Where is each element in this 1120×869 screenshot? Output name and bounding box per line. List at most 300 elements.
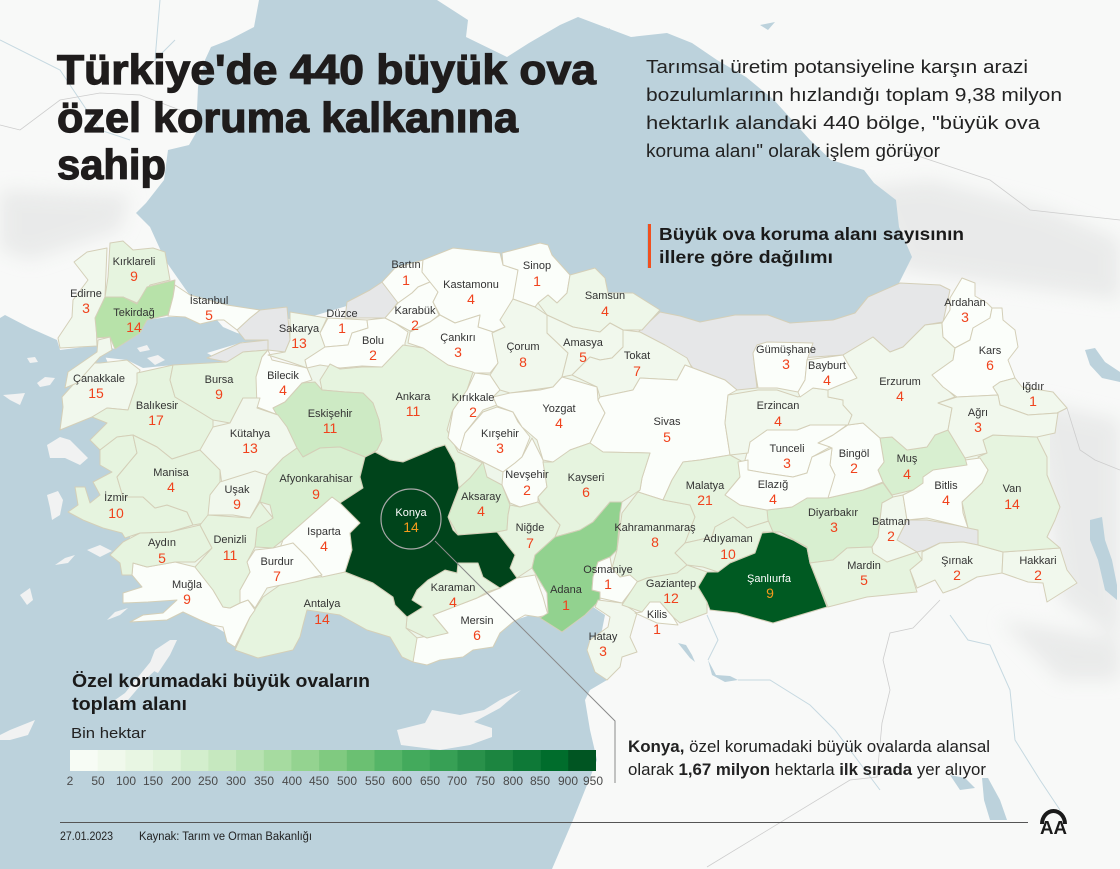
title: Türkiye'de 440 büyük ova: [57, 46, 597, 93]
label: Bolu: 2: [369, 347, 377, 363]
label: Çankırı: [440, 332, 476, 360]
label: Batman: 2: [887, 528, 895, 544]
label: Nevşehir: Nevşehir: [505, 469, 549, 481]
label: Samsun: [585, 290, 625, 319]
label: Bayburt: [808, 360, 846, 388]
legend scale values: 50: [91, 774, 105, 788]
province: Ankara: [320, 345, 483, 488]
label: Sinop: Sinop: [523, 260, 551, 272]
label: Niğde: [516, 522, 544, 551]
label: Karaman: Karaman: [431, 582, 475, 594]
label: Aksaray: 4: [477, 503, 485, 519]
label: Kırıkkale: Kırıkkale: [452, 392, 494, 404]
label: Nevşehir: 2: [523, 482, 531, 498]
legend scale values: 900: [558, 774, 578, 788]
label: Çanakkale: 15: [88, 385, 104, 401]
label: Elazığ: [758, 479, 788, 507]
label: Muş: [897, 453, 918, 482]
province: Şanlıurfa: [698, 532, 827, 623]
label: Niğde: Niğde: [516, 522, 544, 534]
label: Ağrı: Ağrı: [968, 407, 988, 419]
province: Afyonkarahisar: [255, 447, 365, 548]
label: Düzce: [326, 308, 358, 336]
province: Eskişehir: [273, 382, 382, 457]
label: İzmir: [104, 491, 128, 521]
label: Kütahya: Kütahya: [230, 428, 271, 440]
province: Gümüşhane: [753, 342, 813, 392]
label: Muğla: Muğla: [172, 579, 203, 591]
label: Kars: [979, 345, 1002, 373]
label: Konya: 14: [403, 519, 419, 535]
label: Yozgat: Yozgat: [542, 403, 576, 415]
label: Iğdır: [1022, 381, 1044, 409]
label: Aksaray: Aksaray: [461, 491, 501, 503]
label: Samsun: 4: [601, 303, 609, 319]
label: Antalya: [304, 598, 341, 627]
province: Çorum: [490, 299, 568, 393]
province: Karaman: [406, 563, 500, 638]
label: Karabük: Karabük: [395, 305, 436, 317]
map labels: [70, 256, 1057, 659]
label: Edirne: [70, 288, 102, 316]
label: Kütahya: 13: [242, 440, 258, 456]
intro text: koruma alanı" olarak işlem görüyor: [646, 140, 940, 161]
label: Düzce: Düzce: [326, 308, 358, 320]
label: Aydın: 5: [158, 550, 166, 566]
label: Adıyaman: [703, 533, 753, 562]
province: Diyarbakır: [767, 483, 893, 563]
label: Yozgat: 4: [555, 415, 563, 431]
label: Şanlıurfa: 9: [766, 585, 774, 601]
label: Kırşehir: 3: [496, 440, 504, 456]
label: Bitlis: 4: [942, 492, 950, 508]
province: Kırşehir: [460, 407, 530, 472]
label: Adıyaman: 10: [720, 546, 736, 562]
province: Isparta: [280, 497, 360, 577]
label: Tunceli: 3: [783, 455, 791, 471]
label: Antalya: 14: [314, 611, 330, 627]
province: Aydın: [110, 525, 212, 575]
label: Kars: 6: [986, 357, 994, 373]
legend heading: [72, 671, 370, 714]
map: provinces of Türkiye: [58, 241, 1077, 680]
islands: [0, 345, 521, 750]
label: Niğde: 7: [526, 535, 534, 551]
intro text: [646, 56, 1062, 161]
label: Erzincan: 4: [774, 413, 782, 429]
label: Sinop: [523, 260, 551, 289]
label: Nevşehir: [505, 469, 549, 498]
label: Karaman: [431, 582, 475, 610]
label: Bartın: 1: [402, 272, 410, 288]
legend unit: Bin hektar: [71, 725, 146, 742]
province: Osmaniye: [592, 557, 638, 603]
label: Amasya: [563, 337, 604, 365]
province: Sakarya: [268, 312, 327, 368]
label: Kahramanmaraş: 8: [651, 534, 659, 550]
sea: Marmara: [68, 317, 268, 388]
legend heading: toplam alanı: [72, 694, 187, 714]
label: Adana: Adana: [550, 584, 583, 596]
label: Balıkesir: Balıkesir: [136, 400, 178, 412]
label: Şanlıurfa: [747, 573, 792, 601]
province: Bilecik: [256, 350, 312, 415]
label: Karabük: 2: [411, 317, 419, 333]
label: Karaman: 4: [449, 594, 457, 610]
province: Tokat: [572, 330, 692, 397]
label: Kırklareli: [113, 256, 155, 284]
label: Bitlis: [934, 480, 958, 508]
label: Batman: [872, 516, 910, 544]
label: Afyonkarahisar: Afyonkarahisar: [279, 473, 353, 485]
legend scale values: 550: [365, 774, 385, 788]
label: Uşak: [224, 484, 250, 512]
label: Hakkari: 2: [1034, 567, 1042, 583]
province: Amasya: [547, 315, 623, 377]
province: Edirne: [58, 248, 107, 348]
label: Ağrı: [968, 407, 988, 435]
label: Afyonkarahisar: 9: [312, 486, 320, 502]
province: Hakkari: [1002, 548, 1077, 602]
legend scale values: 150: [143, 774, 163, 788]
label: Denizli: 11: [223, 547, 237, 563]
label: Balıkesir: [136, 400, 178, 428]
label: Edirne: 3: [82, 300, 90, 316]
province: İzmir: [68, 435, 193, 538]
label: Erzurum: Erzurum: [879, 376, 921, 388]
label: Bingöl: [839, 448, 869, 476]
label: Edirne: Edirne: [70, 288, 102, 300]
label: Eskişehir: [308, 408, 353, 436]
province: Iğdır: [993, 378, 1067, 415]
province: Erzincan: [725, 388, 852, 455]
label: Gümüşhane: [756, 344, 816, 372]
province: Kütahya: [200, 398, 297, 485]
label: Amasya: Amasya: [563, 337, 604, 349]
province: Bingöl: [818, 423, 884, 498]
label: Batman: Batman: [872, 516, 910, 528]
label: Bursa: 9: [215, 386, 223, 402]
legend colour scale: [70, 750, 596, 771]
label: Diyarbakır: 3: [830, 519, 838, 535]
province: Kırıkkale: [448, 373, 500, 451]
province: Nevşehir: [502, 438, 547, 507]
label: Erzincan: [757, 400, 799, 429]
label: Kastamonu: [443, 279, 499, 307]
label: Manisa: 4: [167, 479, 175, 495]
label: Manisa: [153, 467, 190, 495]
label: Çankırı: Çankırı: [440, 332, 476, 344]
province: Mersin: [413, 575, 548, 665]
label: Tekirdağ: 14: [126, 319, 142, 335]
province: Bartın: [382, 260, 430, 303]
label: Konya: [395, 507, 427, 535]
label: Şırnak: Şırnak: [941, 555, 973, 567]
icon: AA logo: [1040, 809, 1067, 838]
label: Çorum: [506, 341, 540, 370]
label: Adana: 1: [562, 597, 570, 613]
label: Osmaniye: Osmaniye: [583, 564, 633, 576]
legend scale values: 450: [309, 774, 329, 788]
label: Iğdır: Iğdır: [1022, 381, 1044, 393]
label: Kars: Kars: [979, 345, 1002, 357]
province: İstanbul: [168, 285, 260, 330]
province: Kars: [932, 308, 1018, 397]
label: Ankara: Ankara: [396, 391, 431, 403]
label: Erzurum: [879, 376, 921, 404]
label: Malatya: [686, 480, 725, 508]
province: Manisa: [117, 435, 220, 525]
label: Çankırı: 3: [454, 344, 462, 360]
label: Ardahan: 3: [961, 309, 969, 325]
background: terrain shading: [0, 180, 1120, 680]
label: Diyarbakır: Diyarbakır: [808, 507, 858, 519]
province: Şırnak: [910, 542, 1003, 593]
label: Muş: Muş: [897, 453, 918, 465]
label: Ardahan: Ardahan: [944, 297, 986, 309]
province: Batman: [872, 495, 917, 562]
legend scale values: 850: [530, 774, 550, 788]
label: Kahramanmaraş: [614, 522, 696, 550]
label: Ağrı: 3: [974, 419, 982, 435]
label: Çorum: 8: [519, 354, 527, 370]
province: Uşak: [208, 471, 267, 518]
label: Tokat: [624, 350, 650, 379]
intro text: hektarlık alandaki 440 bölge, "büyük ova: [646, 112, 1041, 133]
label: Bitlis: Bitlis: [934, 480, 958, 492]
province: Kilis: [635, 602, 678, 625]
label: Ankara: 11: [406, 403, 420, 419]
label: Muğla: 9: [183, 591, 191, 607]
label: Çanakkale: [73, 373, 125, 401]
footer rule: [60, 822, 1028, 823]
intro text: Tarımsal üretim potansiyeline karşın arazi: [646, 56, 1028, 77]
province: Adıyaman: [675, 517, 773, 572]
island: Cyprus: [397, 690, 521, 750]
label: Bilecik: [267, 370, 299, 398]
map subheading: illere göre dağılımı: [659, 247, 833, 267]
label: Sivas: Sivas: [654, 416, 681, 428]
label: Düzce: 1: [338, 320, 346, 336]
label: Burdur: [260, 556, 294, 584]
non-highlighted grey coast provinces: [207, 282, 978, 552]
label: Uşak: 9: [233, 496, 241, 512]
legend scale values: 2: [67, 774, 74, 788]
label: İstanbul: İstanbul: [190, 294, 228, 307]
province: Erzurum: [828, 323, 955, 450]
label: Erzincan: Erzincan: [757, 400, 799, 412]
label: Elazığ: Elazığ: [758, 479, 788, 491]
label: Gaziantep: 12: [663, 590, 679, 606]
label: Şırnak: [941, 555, 973, 583]
label: Eskişehir: Eskişehir: [308, 408, 353, 420]
label: Kırklareli: Kırklareli: [113, 256, 155, 268]
label: Yozgat: [542, 403, 576, 431]
callout: Konya: Konya, özel korumadaki büyük ovalarda alansal: [628, 738, 990, 756]
label: Osmaniye: [583, 564, 633, 592]
province: Kahramanmaraş: [612, 492, 695, 582]
label: Kilis: [647, 609, 668, 637]
label: Kilis: 1: [653, 621, 661, 637]
province: Bayburt: [798, 355, 857, 397]
label: İstanbul: 5: [205, 307, 213, 323]
label: Kayseri: [568, 472, 604, 500]
province: Tunceli: [745, 425, 847, 477]
label: Muş: 4: [903, 466, 911, 482]
label: Tunceli: [769, 443, 805, 471]
label: Manisa: Manisa: [153, 467, 190, 479]
label: Kırşehir: Kırşehir: [481, 428, 519, 440]
label: Kilis: Kilis: [647, 609, 668, 621]
label: Muğla: [172, 579, 203, 607]
label: Kırklareli: 9: [130, 268, 138, 284]
label: Hatay: [589, 631, 618, 659]
label: Bursa: [205, 374, 234, 402]
legend scale values: 300: [226, 774, 246, 788]
legend scale values: 600: [392, 774, 412, 788]
label: Şanlıurfa: Şanlıurfa: [747, 573, 792, 585]
legend scale values: 100: [116, 774, 136, 788]
Konya callout circle: [381, 489, 441, 549]
province: Karabük: [385, 282, 439, 331]
province: Balıkesir: [90, 365, 213, 459]
province: Muş: [878, 430, 967, 495]
label: Aydın: Aydın: [148, 537, 176, 549]
province: Yozgat: [493, 377, 605, 462]
province: Muğla: [123, 562, 255, 647]
Konya callout leader line: [435, 541, 615, 783]
label: Hatay: Hatay: [589, 631, 618, 643]
province: Antalya: [235, 572, 417, 662]
intro text: bozulumlarının hızlandığı toplam 9,38 milyon: [646, 84, 1062, 105]
legend scale values: 950: [583, 774, 603, 788]
label: Isparta: 4: [320, 538, 328, 554]
label: Ardahan: [944, 297, 986, 325]
footer date: 27.01.2023: [60, 831, 113, 843]
title: özel koruma kalkanına: [57, 94, 519, 141]
label: İstanbul: [190, 294, 228, 323]
label: Mardin: Mardin: [847, 560, 881, 572]
label: Isparta: Isparta: [307, 526, 342, 538]
label: Denizli: Denizli: [213, 534, 247, 546]
label: Elazığ: 4: [769, 491, 777, 507]
label: Kastamonu: Kastamonu: [443, 279, 499, 291]
legend scale values: 400: [282, 774, 302, 788]
label: Mersin: Mersin: [460, 615, 494, 627]
label: Gaziantep: [646, 578, 696, 606]
label: Burdur: Burdur: [260, 556, 294, 568]
province: Kayseri: [538, 443, 650, 537]
footer source: Kaynak: Tarım ve Orman Bakanlığı: [139, 831, 312, 843]
label: Van: [1003, 483, 1021, 512]
province: Bursa: [170, 350, 268, 423]
label: Gümüşhane: 3: [782, 356, 790, 372]
sea: Aegean and Mediterranean: [0, 315, 607, 869]
legend scale values: 200: [171, 774, 191, 788]
label: Bilecik: 4: [279, 382, 287, 398]
label: Eskişehir: 11: [323, 420, 337, 436]
label: Hakkari: Hakkari: [1019, 555, 1057, 567]
province: Kastamonu: [422, 248, 518, 332]
label: Sakarya: Sakarya: [279, 323, 320, 335]
label: Mardin: 5: [860, 572, 868, 588]
label: Burdur: 7: [273, 568, 281, 584]
province: Aksaray: [448, 462, 510, 535]
label: Bursa: Bursa: [205, 374, 234, 386]
legend scale values: [67, 774, 603, 788]
label: Şırnak: 2: [953, 567, 961, 583]
label: İzmir: 10: [108, 505, 124, 521]
label: Mersin: 6: [473, 627, 481, 643]
label: Kırşehir: [481, 428, 519, 456]
label: Bingöl: 2: [850, 460, 858, 476]
map underlay: interior of Türkiye: [110, 270, 1050, 640]
label: Tekirdağ: Tekirdağ: [113, 307, 155, 319]
legend scale values: 750: [475, 774, 495, 788]
province: Van: [962, 435, 1060, 552]
label: Adana: [550, 584, 583, 613]
label: Uşak: Uşak: [224, 484, 250, 496]
label: Tekirdağ: [113, 307, 155, 335]
label: Kayseri: Kayseri: [568, 472, 604, 484]
label: Çorum: Çorum: [506, 341, 540, 353]
label: Bolu: [362, 335, 384, 363]
label: Samsun: Samsun: [585, 290, 625, 302]
label: Hatay: 3: [599, 643, 607, 659]
label: Bilecik: Bilecik: [267, 370, 299, 382]
province: Elazığ: [725, 448, 835, 510]
label: Gaziantep: Gaziantep: [646, 578, 696, 590]
label: Malatya: 21: [697, 492, 713, 508]
label: Bolu: Bolu: [362, 335, 384, 347]
label: Van: Van: [1003, 483, 1021, 495]
label: Kayseri: 6: [582, 484, 590, 500]
map subheading: Büyük ova koruma alanı sayısının: [659, 224, 964, 244]
label: Diyarbakır: [808, 507, 858, 535]
label: Kırıkkale: [452, 392, 494, 420]
province: Sinop: [502, 243, 570, 307]
label: Amasya: 5: [579, 349, 587, 365]
label: Bartın: Bartın: [391, 259, 421, 271]
icon: AA logo: AA: [1040, 818, 1067, 838]
label: Bayburt: 4: [823, 372, 831, 388]
label: Bartın: [391, 259, 421, 288]
province: Niğde: [497, 502, 560, 578]
label: Tokat: 7: [633, 363, 641, 379]
province: Sivas: [590, 365, 737, 500]
label: Balıkesir: 17: [148, 412, 164, 428]
legend scale values: 700: [447, 774, 467, 788]
title: sahip: [57, 141, 166, 188]
label: Gümüşhane: Gümüşhane: [756, 344, 816, 356]
label: Antalya: Antalya: [304, 598, 341, 610]
label: Erzurum: 4: [896, 388, 904, 404]
label: Konya: Konya: [395, 507, 427, 519]
label: Kahramanmaraş: Kahramanmaraş: [614, 522, 696, 534]
label: Aydın: [148, 537, 176, 566]
label: Bayburt: Bayburt: [808, 360, 846, 372]
province: Düzce: [320, 318, 368, 347]
map subheading: [647, 224, 964, 268]
label: Isparta: [307, 526, 342, 554]
label: Hakkari: [1019, 555, 1057, 583]
province: Mardin: [810, 547, 922, 607]
label: Bingöl: Bingöl: [839, 448, 869, 460]
label: Çanakkale: Çanakkale: [73, 373, 125, 385]
province: Konya: [340, 445, 517, 617]
legend scale values: 250: [198, 774, 218, 788]
label: Osmaniye: 1: [604, 576, 612, 592]
